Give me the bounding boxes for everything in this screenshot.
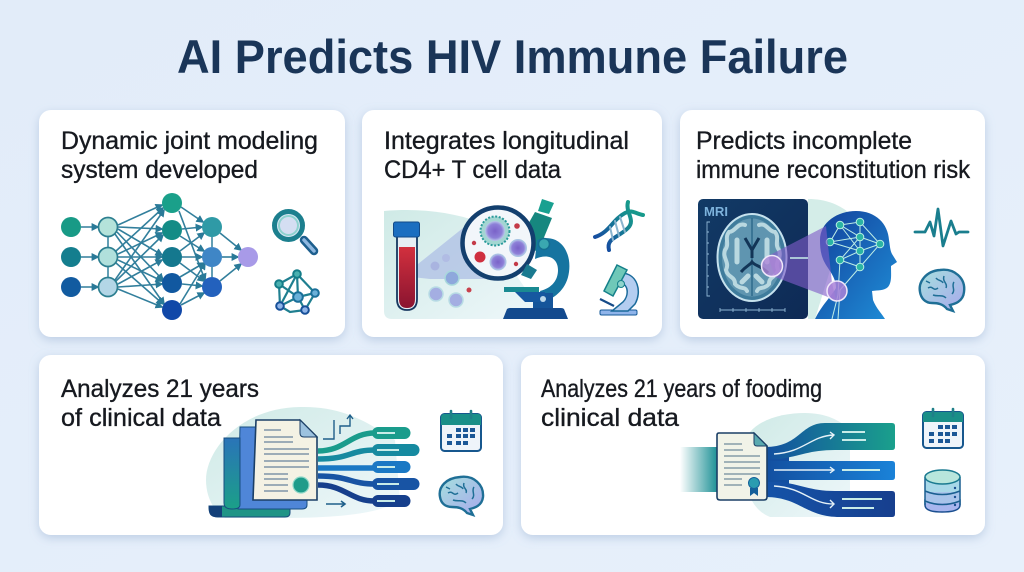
- icon: gradient tail: [680, 447, 718, 492]
- icon: DNA helix: [595, 202, 643, 250]
- icon: microscope objective: [521, 264, 537, 279]
- heading: panel 3: [696, 128, 971, 184]
- icon: purple focus beam: [762, 226, 847, 301]
- icon: small microscope: [600, 265, 638, 315]
- panel: longitudinal CD4+ data: [362, 110, 662, 337]
- icon: database: [925, 470, 960, 512]
- title: AI Predicts HIV Immune Failure: [177, 30, 848, 83]
- heading: panel 3: immune reconstitution risk: [696, 157, 971, 184]
- icon: document stack: [209, 420, 317, 517]
- icon: certificate document: [717, 433, 767, 500]
- icon: beam and floating cells: [403, 224, 505, 307]
- icon: step arrows: [323, 415, 353, 507]
- illustration: pale backdrop: [808, 199, 848, 319]
- heading: panel 2: Integrates longitudinal: [384, 128, 629, 155]
- neural network diagram: [61, 193, 258, 320]
- heading: panel 1: system developed: [61, 157, 258, 184]
- heading: panel 2: [384, 128, 629, 184]
- heading: panel 4: Analyzes 21 years: [61, 376, 259, 403]
- heading: panel 5: [541, 376, 822, 432]
- icon: brain: [440, 477, 483, 515]
- icon: MRI scan: MRI: [704, 205, 728, 219]
- icon: MRI scan: [698, 199, 808, 319]
- icon: pulse waveform: [915, 209, 968, 246]
- icon: human head with network: [815, 211, 897, 319]
- icon: network graph: [275, 270, 319, 314]
- heading: panel 4: of clinical data: [61, 405, 221, 432]
- icon: magnifying glass: [274, 212, 314, 251]
- heading: panel 1: Dynamic joint modeling: [61, 128, 318, 155]
- icon: magnified cells: [462, 208, 534, 278]
- heading: panel 2: CD4+ T cell data: [384, 157, 561, 184]
- panel: incomplete immune reconstitution: [680, 110, 985, 337]
- heading: panel 4: [61, 376, 259, 432]
- panel: 21 years of foodimg clinical data: [521, 355, 985, 535]
- icon: large microscope: [503, 199, 569, 319]
- panel: 21 years of clinical data: [39, 355, 503, 535]
- icon: brain: [920, 270, 964, 311]
- icon: calendar: [441, 411, 481, 451]
- icon: flow bands: [765, 423, 895, 517]
- heading: panel 5: clinical data: [541, 405, 679, 432]
- icon: blood test tube: [394, 222, 420, 310]
- illustration: pale backdrop: [384, 210, 540, 319]
- icon: calendar: [923, 409, 963, 448]
- icon: data flow pills: [318, 427, 420, 507]
- panel: dynamic joint modeling: [39, 110, 345, 337]
- illustration: pale backdrop: [206, 407, 400, 518]
- heading: panel 1: [61, 128, 318, 184]
- illustration: pale backdrop: [745, 413, 850, 517]
- heading: panel 3: Predicts incomplete: [696, 128, 912, 155]
- heading: panel 5: Analyzes 21 years of foodimg: [541, 376, 822, 403]
